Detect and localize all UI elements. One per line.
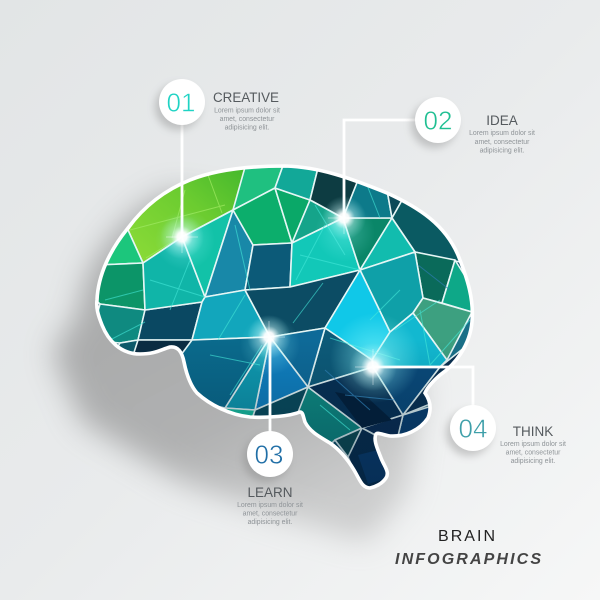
text: creative: Lorem ipsum dolor sit bbox=[214, 108, 280, 114]
badge 02 bbox=[411, 97, 461, 148]
text: learn: amet, consectetur bbox=[243, 510, 298, 518]
brain bbox=[95, 164, 474, 490]
light flare 02 bbox=[322, 196, 366, 240]
text: learn: adipisicing elit. bbox=[248, 519, 292, 526]
badge 03 bbox=[243, 431, 293, 482]
text: idea: amet, consectetur bbox=[475, 139, 530, 146]
text: creative bbox=[213, 90, 280, 132]
text: creative: adipisicing elit. bbox=[225, 124, 269, 132]
light flare 03 bbox=[247, 315, 291, 359]
light flare 01 bbox=[160, 215, 204, 259]
text: think: THINK bbox=[513, 424, 553, 439]
text: learn: LEARN bbox=[247, 485, 293, 500]
text: learn bbox=[237, 485, 303, 526]
text: think: amet, consectetur bbox=[506, 450, 561, 456]
text: think: adipisicing elit. bbox=[511, 458, 555, 465]
title: BRAIN bbox=[438, 528, 495, 545]
polygon mesh bbox=[98, 168, 471, 486]
text: idea: Lorem ipsum dolor sit bbox=[469, 130, 535, 137]
light flare 04 bbox=[349, 343, 397, 391]
title bbox=[395, 528, 541, 568]
text: learn: Lorem ipsum dolor sit bbox=[237, 502, 303, 509]
text: creative: amet, consectetur bbox=[220, 116, 275, 123]
text: think: Lorem ipsum dolor sit bbox=[500, 441, 566, 448]
brain long shadow bbox=[52, 192, 422, 542]
inner facet lines and glows bbox=[90, 150, 490, 490]
connector lines bbox=[182, 120, 473, 435]
text: idea bbox=[469, 113, 535, 154]
text: idea: adipisicing elit. bbox=[480, 148, 524, 154]
text: idea: IDEA bbox=[486, 113, 518, 128]
badge 01: 01 bbox=[167, 88, 195, 118]
text: creative: CREATIVE bbox=[213, 90, 279, 105]
badge 01 bbox=[155, 79, 205, 130]
badge 03: 03 bbox=[255, 440, 283, 470]
badge 02: 02 bbox=[424, 106, 452, 136]
title: INFOGRAPHICS bbox=[395, 551, 541, 568]
badge 04 bbox=[446, 405, 496, 456]
text: think bbox=[500, 424, 566, 465]
badge 04: 04 bbox=[459, 414, 487, 444]
